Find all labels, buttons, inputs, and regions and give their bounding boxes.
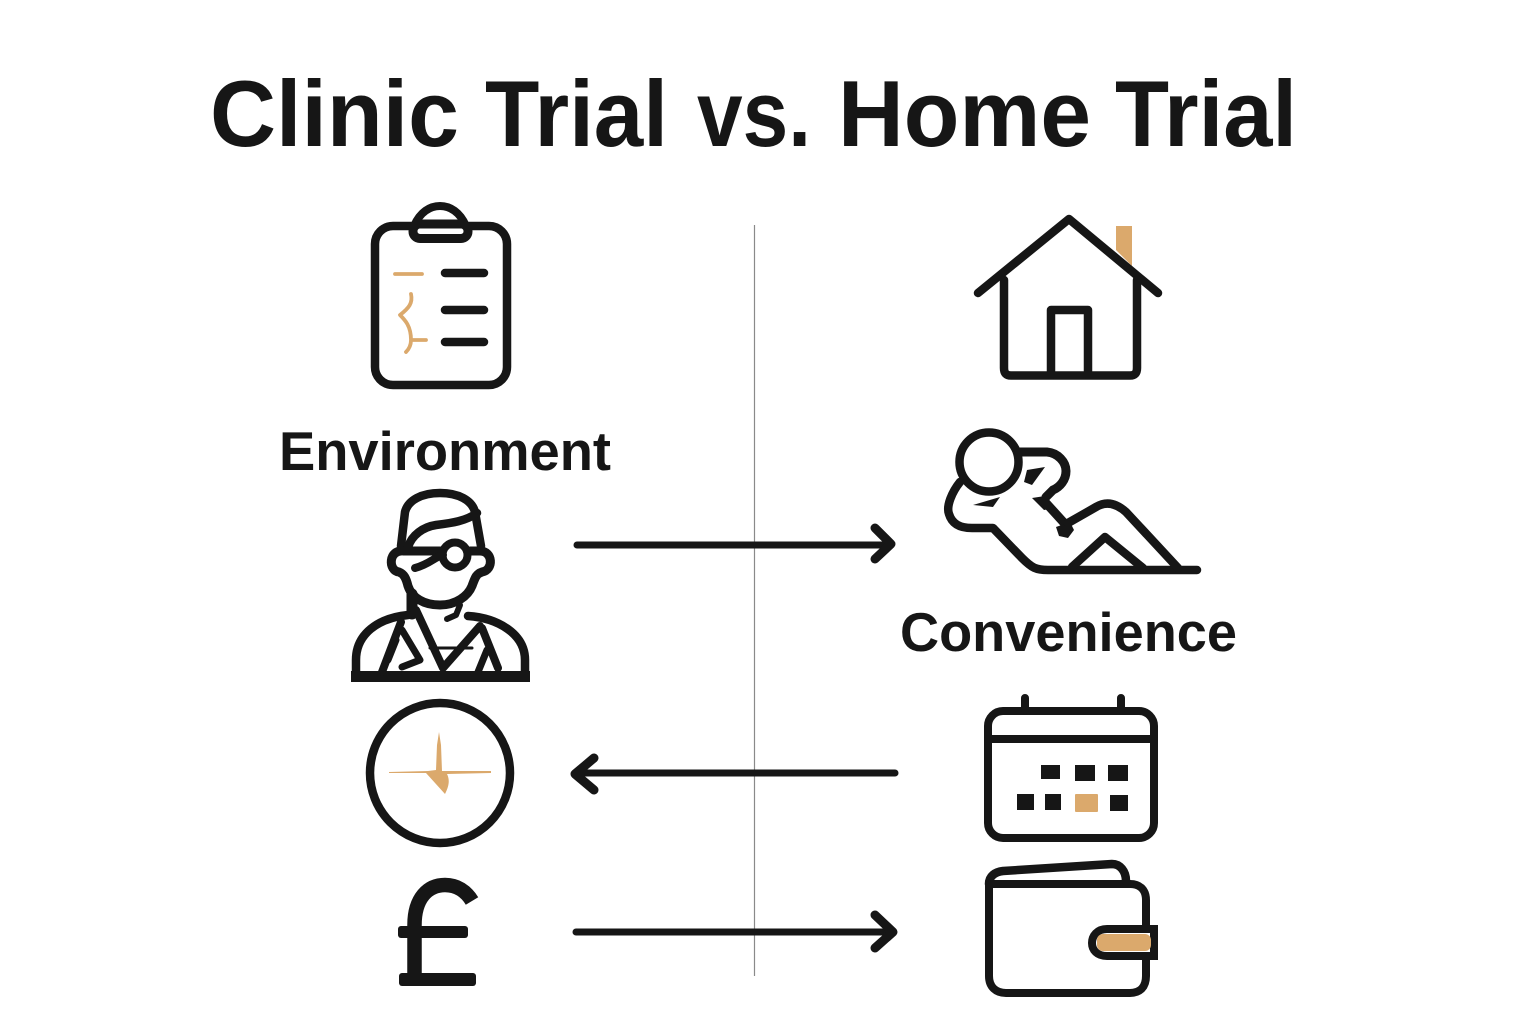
center divider bbox=[754, 225, 756, 976]
title: Clinic bbox=[210, 61, 459, 166]
title: vs. bbox=[697, 61, 811, 166]
arrow: pound to wallet bbox=[576, 915, 893, 948]
icon: pound sign bbox=[398, 885, 476, 986]
icon: clipboard bbox=[375, 206, 507, 385]
arrow: calendar to clock bbox=[575, 758, 895, 790]
arrow: clinician to relaxing at home bbox=[577, 528, 891, 559]
icon: calendar bbox=[988, 698, 1154, 838]
icon: person relaxing bbox=[948, 432, 1197, 570]
icon: wallet bbox=[989, 864, 1154, 993]
icon: house bbox=[978, 219, 1158, 376]
heading: environment: Environment bbox=[279, 420, 611, 482]
heading: convenience: Convenience bbox=[900, 601, 1237, 663]
icon: clock bbox=[370, 703, 510, 843]
title: Trial bbox=[485, 61, 668, 166]
icon: clinician bbox=[351, 493, 530, 682]
title bbox=[210, 61, 1297, 166]
title: Home bbox=[838, 61, 1091, 166]
title: Trial bbox=[1115, 61, 1297, 166]
